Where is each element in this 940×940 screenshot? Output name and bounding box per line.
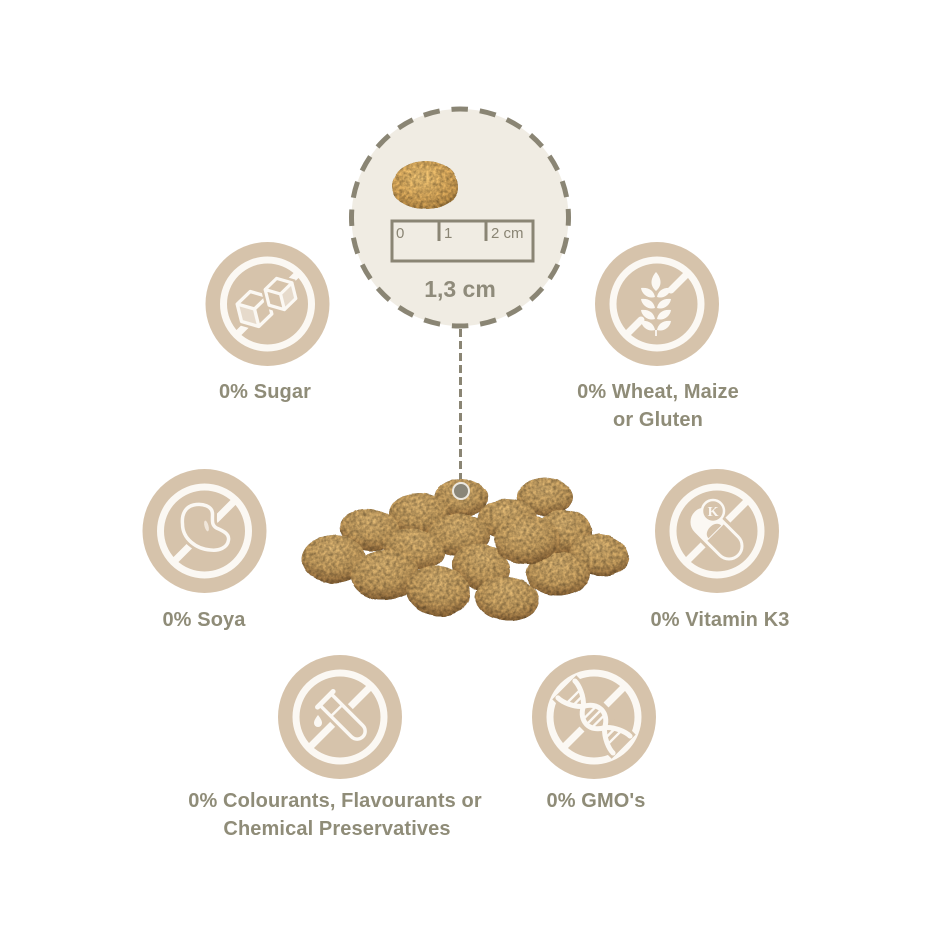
size value: 1,3 cm [424,276,496,302]
panel: 0% colourants, flavourants or chemical preservatives [188,655,482,840]
ruler: 1 [444,225,452,242]
icon: no test tube [278,655,402,779]
icon: no soya bean [142,469,266,593]
panel: 0% wheat, maize or gluten [577,242,739,431]
ruler: 2 cm [491,225,524,242]
ruler: 0 [396,225,404,242]
panel: 0% sugar [206,242,330,403]
label: or Gluten [613,409,703,431]
panel: 0% soya [142,469,266,631]
label: 0% Wheat, Maize [577,381,739,403]
label: 0% Sugar [219,381,311,403]
label: 0% Vitamin K3 [650,609,790,631]
panel: 0% gmo's [532,655,656,812]
panel: kibble size [352,109,568,326]
label [188,790,482,840]
icon: no dna [532,655,656,779]
connector line [459,329,462,484]
panel: 0% vitamin k3 [650,469,790,631]
label: 0% Colourants, Flavourants or [188,790,482,812]
icon: no sugar cubes [206,242,330,366]
icon: no wheat [595,242,719,366]
connector dot [453,483,469,499]
dashed circle border [352,109,568,326]
icon: no vitamin k capsule: K [708,505,719,520]
size circle [352,109,568,326]
single kibble [392,161,458,209]
label: 0% GMO's [546,790,646,812]
label: 0% Soya [162,609,246,631]
kibble pile [302,478,632,624]
label [577,381,739,431]
icon: no vitamin k capsule [655,469,779,593]
ruler [392,221,533,261]
label: Chemical Preservatives [223,818,451,840]
